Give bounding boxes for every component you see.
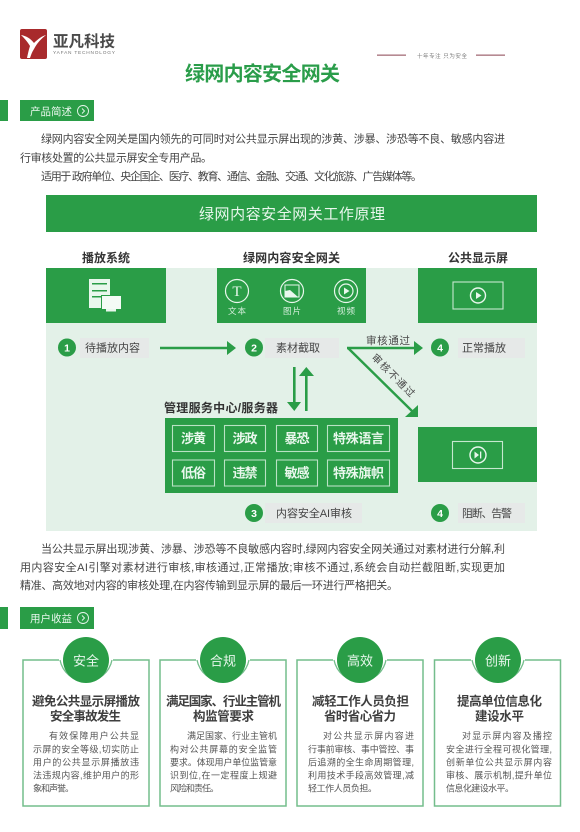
card body: 要求。体现用户单位监管意 <box>170 756 277 768</box>
arrows: bidirectional <box>287 367 314 411</box>
category: 暴恐: 暴恐 <box>284 431 310 446</box>
intro text <box>20 132 505 183</box>
step 3: 内容安全AI审核 <box>276 506 352 520</box>
card heading: 构监管要求 <box>193 708 254 724</box>
category: 涉黄 <box>172 426 214 452</box>
slogan: 十年专注 只为安全 <box>417 52 467 60</box>
icon: text: T <box>232 284 242 300</box>
badge: 创新 <box>471 637 525 683</box>
intro text: 绿网内容安全网关是国内领先的可同时对公共显示屏出现的涉黄、涉暴、涉恐等不良、敏感内容进 <box>41 132 505 146</box>
card body: 创新单位公共显示屏内容 <box>446 756 552 768</box>
badge: 创新: 创新 <box>485 654 511 668</box>
box: playback system <box>46 268 166 323</box>
icon: image: 图片 <box>283 306 301 316</box>
explanation text <box>20 542 505 592</box>
category: 违禁 <box>224 460 266 486</box>
card heading <box>166 694 281 724</box>
step 3 <box>245 503 362 523</box>
slogan <box>377 52 505 60</box>
card body: 审核、展示机制,提升单位 <box>446 770 552 780</box>
category: 特殊旗帜: 特殊旗帜 <box>333 466 384 480</box>
card heading: 省时省心省力 <box>324 708 396 724</box>
section tag: 用户收益 <box>0 607 94 629</box>
arrow: rejected: 审核不通过 <box>369 351 418 400</box>
card heading: 满足国家、行业主管机 <box>166 694 281 708</box>
step 4: block and alert: 阻断、告警 <box>462 506 512 520</box>
column label: 播放系统: 播放系统 <box>82 250 130 265</box>
icon: image <box>280 280 304 316</box>
category: 敏感 <box>276 460 318 486</box>
category: 涉黄: 涉黄 <box>181 431 206 446</box>
badge: 安全 <box>59 637 113 683</box>
panel: benefit compliance <box>160 637 286 806</box>
card body: 象和声誉。 <box>33 782 74 794</box>
arrow: step 1 to step 2 <box>160 341 236 355</box>
card body: 识到位,在一定程度上规避 <box>170 770 277 780</box>
title: 绿网内容安全网关 <box>185 62 340 86</box>
step 3: 3 <box>251 508 257 520</box>
category: 特殊语言 <box>328 426 390 452</box>
box: gateway <box>217 268 366 323</box>
category: 涉政: 涉政 <box>232 431 258 446</box>
card body: 对公共显示屏内容进 <box>323 730 414 741</box>
card body: 有效保障用户公共显 <box>49 730 139 741</box>
column label: 公共显示屏: 公共显示屏 <box>448 251 508 265</box>
card heading: 安全事故发生 <box>50 708 121 724</box>
category: 低俗 <box>172 460 214 486</box>
card body <box>308 730 414 794</box>
icon: video: 视频 <box>337 306 355 316</box>
explanation text: 精准、高效地对内容的审核处理,在内容传输到显示屏的最后一环进行严格把关。 <box>20 578 398 592</box>
category: 涉政 <box>224 426 266 452</box>
panel: benefit safety <box>23 637 149 806</box>
card heading: 避免公共显示屏播放 <box>32 694 140 708</box>
arrow: rejected <box>348 348 418 417</box>
step 1: 待播放内容 <box>85 340 140 354</box>
panel: benefit efficiency <box>297 637 423 806</box>
step 4: normal playback: 正常播放 <box>462 340 506 354</box>
badge: 合规 <box>196 637 250 683</box>
logo <box>20 29 116 59</box>
intro text: 行审核处置的公共显示屏安全专用产品。 <box>20 150 212 164</box>
section tag: 产品简述: 产品简述 <box>30 105 72 118</box>
diagram header <box>46 195 537 232</box>
step 2: 素材截取 <box>276 340 320 354</box>
card body <box>170 730 277 794</box>
logo: YAFAN TECHNOLOGY <box>53 50 116 56</box>
badge: 高效: 高效 <box>347 654 373 668</box>
card heading: 建设水平 <box>475 708 524 724</box>
panel: benefit innovation <box>434 637 560 806</box>
icon: video <box>334 280 358 316</box>
panel: working principle diagram <box>46 195 537 531</box>
card body: 轻工作人员负担。 <box>308 782 377 794</box>
card heading <box>312 694 409 724</box>
intro text: 适用于 政府单位、央企国企、医疗、教育、通信、金融、交通、文化旅游、广告媒体等。 <box>41 169 422 183</box>
card body: 利用技术手段高效管理,减 <box>308 770 414 780</box>
label: management server: 管理服务中心/服务器 <box>164 400 278 415</box>
card body: 安全进行全程可视化管理, <box>446 744 552 754</box>
diagram header: 绿网内容安全网关工作原理 <box>199 205 385 223</box>
card body: 风险和责任。 <box>170 782 219 794</box>
category: 特殊旗帜 <box>328 460 390 486</box>
card body <box>33 730 139 794</box>
card body: 满足国家、行业主管机 <box>187 730 277 741</box>
step 2 <box>245 338 339 358</box>
card body: 示屏的安全等级,切实防止 <box>33 744 139 754</box>
badge: 合规: 合规 <box>210 654 236 668</box>
card body: 用户的公共显示屏播放违 <box>33 756 139 768</box>
card heading: 减轻工作人员负担 <box>312 694 409 708</box>
category: 暴恐 <box>276 426 318 452</box>
box: public display <box>418 268 537 323</box>
card body: 行事前审核、事中管控、事 <box>308 744 414 754</box>
step 4: block and alert: 4 <box>437 508 443 520</box>
category: 敏感: 敏感 <box>284 466 310 480</box>
section tag: 用户收益: 用户收益 <box>30 612 72 625</box>
arrow: approved <box>347 334 423 355</box>
step 1: 1 <box>64 342 70 354</box>
explanation text: 用内容安全AI引擎对素材进行审核,审核通过,正常播放;审核不通过,系统会自动拦截阻断,实现更加 <box>20 560 505 574</box>
panel: content categories <box>165 418 398 493</box>
card body: 信息化建设水平。 <box>446 782 514 794</box>
category: 违禁: 违禁 <box>232 466 258 480</box>
arrow: approved: 审核通过 <box>366 334 410 347</box>
card body <box>446 730 552 794</box>
icon: text <box>226 280 248 316</box>
category: 低俗: 低俗 <box>181 466 206 480</box>
badge: 安全: 安全 <box>73 654 99 668</box>
badge: 高效 <box>333 637 387 683</box>
card heading: 提高单位信息化 <box>457 694 542 708</box>
column label: 绿网内容安全网关: 绿网内容安全网关 <box>243 250 340 265</box>
card body: 构对公共屏幕的安全监管 <box>170 744 277 754</box>
card body: 后追溯的全生命周期管理, <box>308 756 414 768</box>
icon: text: 文本 <box>228 306 246 316</box>
step 1 <box>58 338 149 358</box>
step 4: normal playback <box>431 338 525 358</box>
category: 特殊语言: 特殊语言 <box>333 431 384 446</box>
card heading <box>32 694 140 724</box>
step 4: normal playback: 4 <box>437 342 443 354</box>
section tag: 产品简述 <box>0 100 94 121</box>
logo: 亚凡科技 <box>53 32 115 50</box>
card heading <box>457 694 542 724</box>
box: blocked display <box>418 427 537 482</box>
card body: 法违规内容,维护用户的形 <box>33 770 139 780</box>
card body: 对显示屏内容及播控 <box>462 730 552 741</box>
diagram background <box>46 268 537 531</box>
explanation text: 当公共显示屏出现涉黄、涉暴、涉恐等不良敏感内容时,绿网内容安全网关通过对素材进行分解,利 <box>41 542 505 556</box>
step 4: block and alert <box>431 503 525 523</box>
step 2: 2 <box>251 342 257 354</box>
